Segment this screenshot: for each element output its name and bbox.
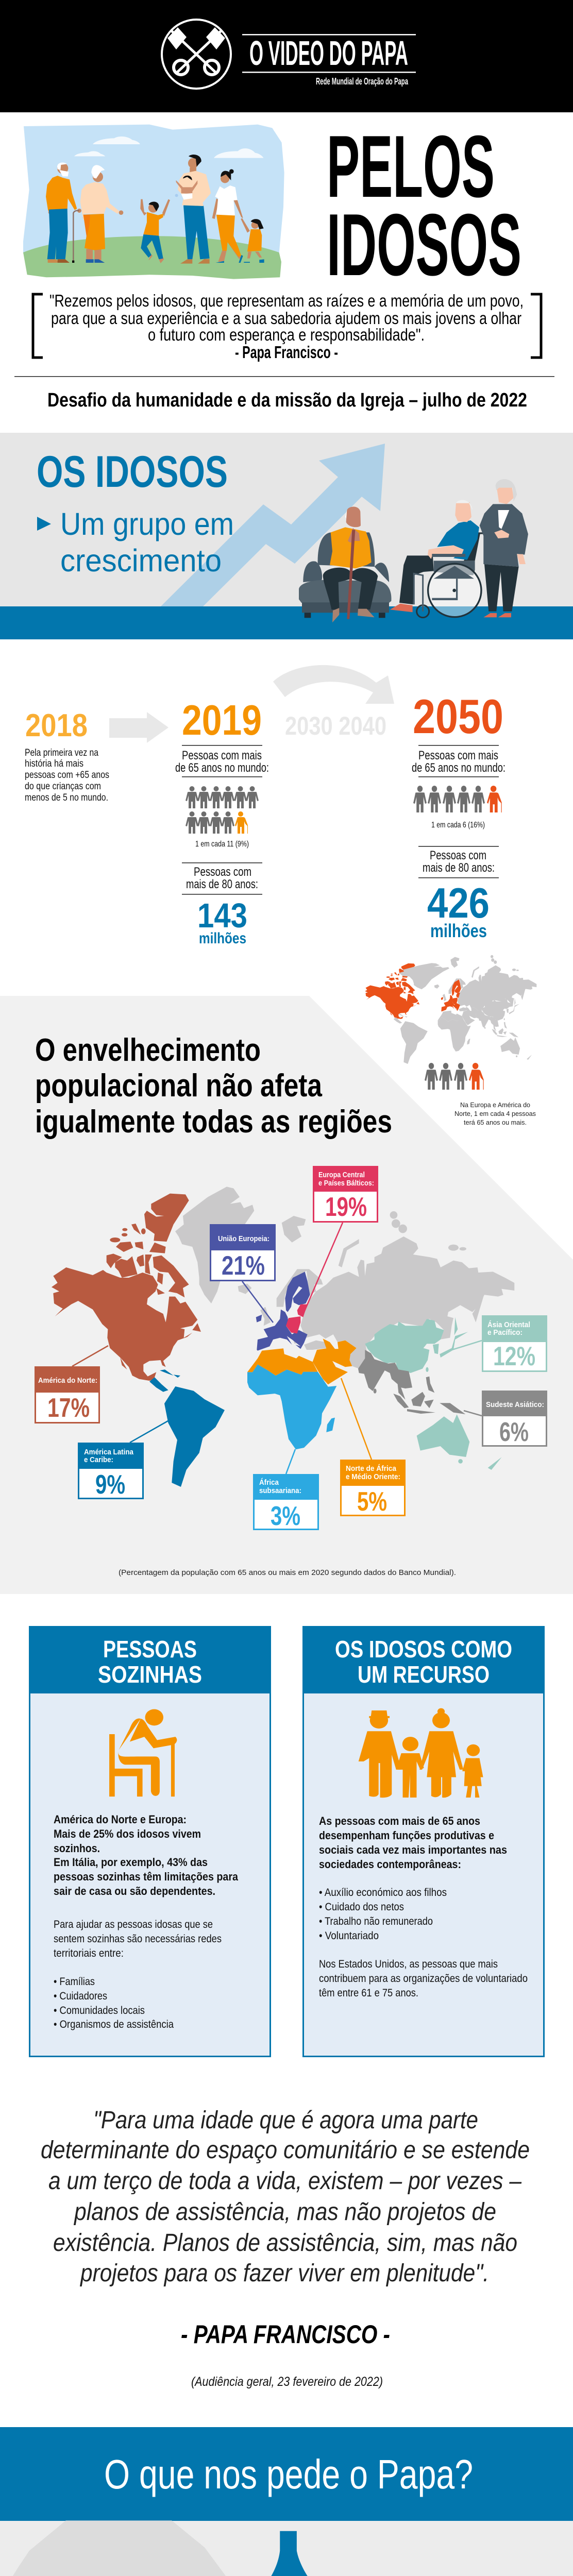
brand name: O VIDEO DO PAPA: [249, 34, 408, 73]
callout: North America: América do Norte:: [38, 1376, 97, 1385]
arrow: 2018 to 2019: [109, 712, 168, 743]
illustration: head silhouette: [0, 2520, 243, 2576]
text: people alone facts: Em Itália, por exemplo, 43% das: [54, 1856, 208, 1869]
pope quote: existência. Planos de assistência, sim, mas não: [53, 2229, 517, 2257]
pope quote: planos de assistência, mas não projetos de: [73, 2198, 496, 2226]
text: 2018 description: história há mais: [25, 758, 83, 769]
timeline: 2050: 2050: [413, 689, 503, 743]
brand name: Rede Mundial de Oração do Papa: [316, 76, 409, 87]
text: over 80 label: mais de 80 anos:: [186, 877, 258, 891]
panel: regional ageing background: [0, 996, 573, 1594]
callout: Southeast Asia: 6%: [499, 1417, 529, 1447]
text: people alone facts: • Cuidadores: [54, 1990, 107, 2002]
text: resource facts: Nos Estados Unidos, as pessoas que mais: [319, 1958, 498, 1970]
callout: East Asia and Pacific: 12%: [493, 1342, 535, 1371]
callout: Central Europe and Baltics: e Países Bálticos:: [318, 1179, 374, 1188]
callout: Sub-Saharan Africa: 3%: [271, 1501, 300, 1531]
callout: North America: [35, 1366, 100, 1423]
callout: Latin America: e Caribe:: [84, 1456, 113, 1464]
text: 2050 over 80 label: [423, 849, 495, 875]
pope quote: determinante do espaço comunitário e se estende: [41, 2137, 530, 2164]
quote with brackets: [33, 291, 541, 362]
text: people alone facts: [54, 1813, 239, 2030]
heading: uneven ageing: O envelhecimento: [35, 1032, 261, 1068]
text: people alone facts: sair de casa ou são dependentes.: [54, 1885, 215, 1897]
panel: people alone: SOZINHAS: [98, 1661, 202, 1688]
text: resource facts: têm entre 61 e 75 anos.: [319, 1987, 418, 1999]
banner subheading: Um grupo em: [60, 506, 234, 541]
quote attribution: - PAPA FRANCISCO -: [181, 2320, 390, 2349]
timeline: 2018: 2018: [25, 708, 88, 743]
pope quote: [41, 2107, 530, 2389]
callout: European Union: [210, 1224, 276, 1281]
brand name: [242, 34, 416, 87]
text: over 80 label: Pessoas com: [194, 865, 251, 879]
callout: East Asia and Pacific: [482, 1315, 547, 1371]
text: Europe and North America note: Norte, 1 em cada 4 pessoas: [454, 1110, 536, 1117]
callout: Latin America: 9%: [95, 1470, 125, 1500]
icon: triangle bullet: [37, 517, 51, 531]
text: resource facts: contribuem para as organizações de voluntariado: [319, 1973, 528, 1985]
stat: 426 million: 426: [427, 879, 490, 927]
text: over 80 label: [186, 865, 258, 891]
panel: elderly as a resource: UM RECURSO: [358, 1661, 490, 1688]
text: Europe and North America note: Na Europa e América do: [460, 1101, 530, 1109]
text: 2050 over 80 label: Pessoas com: [430, 849, 486, 862]
text: over 65 label: [175, 749, 269, 775]
callout: Central Europe and Baltics: Europa Central: [318, 1171, 365, 1179]
icon row: 1 in 6: [413, 786, 502, 812]
stat: 143 million: 143: [197, 896, 247, 935]
heading: uneven ageing: igualmente todas as regiões: [35, 1104, 392, 1140]
title: [327, 117, 521, 294]
header band: [0, 0, 573, 112]
callout: East Asia and Pacific: Ásia Oriental: [487, 1320, 530, 1329]
pope quote: "Para uma idade que é agora uma parte: [93, 2107, 478, 2134]
text: people alone facts: pessoas sozinhas têm limitações para: [54, 1870, 239, 1883]
text: 2050 over 65 label: Pessoas com mais: [418, 749, 498, 762]
panel: requests background: [0, 2521, 573, 2576]
callout: Central Europe and Baltics: 19%: [325, 1192, 367, 1222]
text: people alone facts: • Comunidades locais: [54, 2005, 145, 2016]
stat: 143 million: [197, 896, 247, 947]
text: over 65 label: Pessoas com mais: [182, 749, 262, 762]
banner: what the Pope asks: [0, 2427, 573, 2521]
text: Europe and North America note: [454, 1101, 536, 1126]
stat: 426 million: milhões: [430, 920, 487, 941]
text: resource facts: As pessoas com mais de 65 anos: [319, 1815, 480, 1827]
text: people alone facts: sozinhos.: [54, 1842, 100, 1855]
quote with brackets: - Papa Francisco -: [235, 343, 338, 362]
callout: Latin America: [78, 1443, 144, 1500]
text: resource facts: • Voluntariado: [319, 1930, 379, 1942]
text: over 65 label: de 65 anos no mundo:: [175, 761, 269, 775]
icon row: 1 in 11: [186, 786, 259, 834]
panel: elderly as a resource: OS IDOSOS COMO: [335, 1636, 512, 1663]
text: Europe and North America note: terá 65 anos ou mais.: [464, 1118, 527, 1126]
banner subheading: crescimento: [60, 543, 222, 578]
text: resource facts: [319, 1815, 528, 1999]
icon: family: [359, 1708, 483, 1798]
text: 2018 description: Pela primeira vez na: [25, 748, 98, 758]
illustration: elderly people: [299, 479, 528, 622]
text: 2018 description: pessoas com +65 anos: [25, 770, 109, 781]
timeline: 2019: [175, 696, 269, 947]
pope quote: projetos para os fazer viver em plenitude".: [79, 2260, 489, 2287]
heading: uneven ageing: [35, 1032, 392, 1140]
arrow: curved to 2050: [273, 665, 394, 704]
icon row: 1 in 4: [425, 1063, 484, 1090]
arrow: growth: [161, 444, 385, 606]
text: 2018 description: do que crianças com: [25, 781, 101, 792]
text: people alone facts: sentem sozinhas são necessárias redes: [54, 1933, 222, 1945]
text: people alone facts: territoriais entre:: [54, 1947, 124, 1959]
banner: what the Pope asks: O que nos pede o Papa?: [104, 2451, 473, 2497]
text: 2018 description: menos de 5 no mundo.: [25, 792, 108, 803]
callout: North Africa and Middle East: [340, 1460, 406, 1517]
callout: North America: 17%: [47, 1393, 90, 1423]
callout: Sub-Saharan Africa: África: [259, 1478, 279, 1487]
callout: Sub-Saharan Africa: [253, 1474, 319, 1531]
text: resource facts: sociais cada vez mais importantes nas: [319, 1843, 507, 1856]
text: 2018 description: [25, 748, 109, 803]
stat: 1 in 11: 1 em cada 11 (9%): [195, 840, 249, 849]
text: people alone facts: Mais de 25% dos idosos vivem: [54, 1827, 201, 1840]
panel: people alone: PESSOAS: [103, 1636, 197, 1663]
stat: 426 million: [427, 879, 490, 941]
illustration: family on a hill: [23, 125, 284, 279]
text: people alone facts: • Organismos de assistência: [54, 2019, 174, 2030]
heading: uneven ageing: populacional não afeta: [35, 1068, 322, 1104]
chart: world map by region: [52, 1187, 514, 1487]
text: people alone facts: Para ajudar as pessoas idosas que se: [54, 1919, 213, 1930]
text: resource facts: desempenham funções produtivas e: [319, 1829, 494, 1842]
timeline: 2018: [25, 708, 109, 803]
text: people alone facts: América do Norte e Europa:: [54, 1813, 187, 1826]
text: resource facts: • Cuidado dos netos: [319, 1901, 404, 1913]
callout: Central Europe and Baltics: [313, 1166, 378, 1222]
panel: people alone: [29, 1626, 271, 2057]
icon: seated elder with cane: [109, 1709, 177, 1797]
text: 2050 over 80 label: mais de 80 anos:: [423, 861, 495, 875]
panel: os idosos banner: [0, 433, 573, 639]
callout: North Africa and Middle East: 5%: [357, 1487, 387, 1517]
callout: Latin America: América Latina: [84, 1448, 134, 1456]
callout: Southeast Asia: Sudeste Asiático:: [486, 1400, 544, 1409]
quote with brackets: o futuro com esperança e responsabilidade".: [148, 325, 425, 344]
map footnote: (Percentagem da população com 65 anos ou mais em 2020 segundo dados do Banco Mundial).: [119, 1569, 456, 1577]
arrow: fork: [231, 2531, 345, 2576]
timeline: 2019: 2019: [182, 696, 262, 744]
stat: 1 in 6: 1 em cada 6 (16%): [431, 821, 485, 829]
stat: 143 million: milhões: [199, 930, 246, 947]
callout: East Asia and Pacific: e Pacífico:: [487, 1329, 523, 1337]
quote source: (Audiência geral, 23 fevereiro de 2022): [191, 2375, 383, 2389]
pope quote: a um terço de toda a vida, existem – por vezes –: [48, 2167, 521, 2195]
text: resource facts: • Auxílio económico aos filhos: [319, 1887, 447, 1899]
timeline: 2050: [412, 689, 505, 941]
text: 2050 over 65 label: [412, 749, 505, 775]
callout: Sub-Saharan Africa: subsaariana:: [259, 1487, 301, 1495]
banner subheading: [60, 506, 234, 578]
logo: crossed keys: [162, 20, 231, 89]
text: resource facts: • Trabalho não remunerado: [319, 1916, 433, 1927]
callout: North Africa and Middle East: Norte de África: [346, 1464, 397, 1473]
text: 2050 over 65 label: de 65 anos no mundo:: [412, 761, 505, 775]
callout: European Union: União Europeia:: [218, 1234, 269, 1243]
text: resource facts: sociedades contemporâneas:: [319, 1858, 461, 1871]
callout: North Africa and Middle East: e Médio Oriente:: [346, 1473, 400, 1481]
text: people alone facts: • Famílias: [54, 1976, 95, 1988]
callout: Southeast Asia: [482, 1391, 547, 1447]
callout: European Union: 21%: [222, 1251, 265, 1281]
panel: elderly as a resource: [302, 1626, 545, 2057]
banner heading: OS IDOSOS: [37, 447, 228, 497]
timeline: 2030 2040: 2030 2040: [285, 711, 386, 740]
chart: small world map: [365, 955, 536, 1064]
